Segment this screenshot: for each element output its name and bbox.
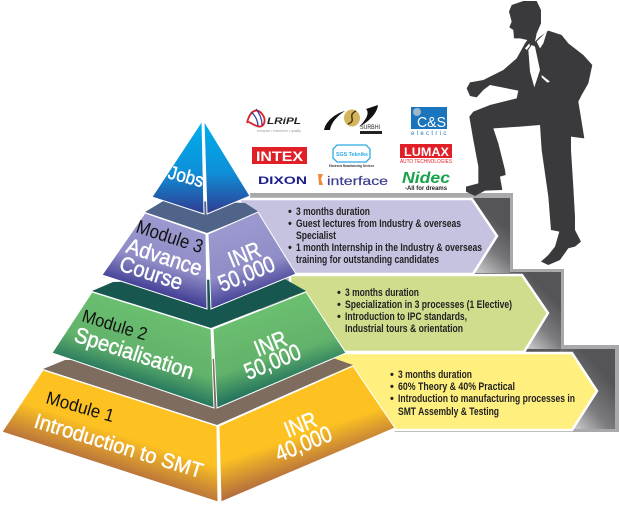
logo: LRIPL: LRiPL xyxy=(267,116,301,127)
logo: SGS Tekniks xyxy=(329,145,374,168)
text: module 2 bullets xyxy=(337,287,512,335)
pyramid tier: module 3 xyxy=(102,200,296,309)
text: module 1 bullets: • xyxy=(390,369,394,381)
arrow: module 1 details xyxy=(330,353,597,430)
logo: INTEX: INTEX xyxy=(256,148,304,164)
label: module 2: Module 2 xyxy=(80,306,150,344)
text: module 2 bullets: Industrial tours & orientation xyxy=(345,323,463,335)
label: specialisation: Specialisation xyxy=(71,322,197,384)
logo: LRIPL: enhance • transform • quality xyxy=(257,129,301,133)
text: module 2 bullets: • xyxy=(337,311,341,323)
logo: interface: interface xyxy=(327,176,388,188)
text: module 3 bullets: • xyxy=(288,242,292,254)
text: module 1 bullets: • xyxy=(390,393,394,405)
text: module 3 bullets: Guest lectures from Industry & overseas xyxy=(296,218,461,230)
text: module 2 bullets: Introduction to IPC standards, xyxy=(345,311,467,323)
logo: SGS Tekniks: Electronic Manufacturing Services xyxy=(329,164,374,168)
label: jobs: Jobs xyxy=(166,163,206,192)
logo: SGS Tekniks: SGS Tekniks xyxy=(336,152,368,158)
arrow: module 2 details xyxy=(290,275,548,352)
logo: LUMAX: LUMAX xyxy=(404,145,449,159)
text: module 1 bullets xyxy=(390,369,575,418)
text: module 2 bullets: Specialization in 3 processes (1 Elective) xyxy=(345,299,512,311)
label: advance: Advance xyxy=(123,233,205,281)
text: module 2 bullets: • xyxy=(337,299,341,311)
logo: Nidec: -All for dreams xyxy=(405,186,448,192)
price: module 2: 50,000 xyxy=(240,338,305,385)
logo: C&S electric xyxy=(411,107,447,137)
pyramid tier: module 1 xyxy=(2,358,395,502)
logo: Nidec: Nidec xyxy=(402,170,450,187)
text: module 1 bullets: 3 months duration xyxy=(398,369,472,381)
arrow: module 3 details xyxy=(240,199,497,274)
label: course: Course xyxy=(116,251,186,295)
logo: Surbhi xyxy=(324,105,382,134)
logo: LRIPL xyxy=(247,109,301,133)
price: module 2: INR xyxy=(250,325,290,362)
price: module 3: INR xyxy=(224,236,264,273)
text: module 2 bullets: 3 months duration xyxy=(345,287,419,299)
text: module 3 bullets: training for outstanding candidates xyxy=(296,254,439,266)
text: module 1 bullets: 60% Theory & 40% Practical xyxy=(398,381,515,393)
logo: LUMAX xyxy=(400,144,453,165)
logo: C&S electric: C&S xyxy=(417,114,446,131)
text: module 1 bullets: SMT Assembly & Testing xyxy=(398,406,499,418)
text: module 3 bullets: 1 month Internship in the Industry & overseas xyxy=(296,242,482,254)
staircase xyxy=(250,193,619,432)
pyramid top: jobs xyxy=(152,121,250,214)
pyramid tier: module 2 xyxy=(52,278,346,408)
price: module 1: INR xyxy=(280,406,320,443)
logo: interface xyxy=(318,174,388,188)
logo: Surbhi: SURBHI xyxy=(360,125,380,131)
label: module 1: Module 1 xyxy=(44,388,117,426)
logo: Dixon: DIXON xyxy=(258,175,307,187)
text: module 3 bullets: 3 months duration xyxy=(296,206,370,218)
text: module 1 bullets: • xyxy=(390,381,394,393)
text: module 3 bullets: Specialist xyxy=(296,230,336,242)
text: module 2 bullets: • xyxy=(337,287,341,299)
label: module 3: Module 3 xyxy=(133,217,206,258)
logo: LUMAX: AUTO TECHNOLOGIES xyxy=(400,159,453,165)
text: module 3 bullets xyxy=(288,206,482,266)
text: module 1 bullets: Introduction to manufacturing processes in xyxy=(398,393,575,405)
label: introduction to SMT: Introduction to SMT xyxy=(32,410,206,483)
price: module 1: 40,000 xyxy=(271,420,336,467)
text: module 3 bullets: • xyxy=(288,206,292,218)
text: module 3 bullets: • xyxy=(288,218,292,230)
logo: C&S electric: electric xyxy=(411,131,447,137)
icon: businessman silhouette climbing steps xyxy=(466,1,592,265)
price: module 3: 50,000 xyxy=(214,250,279,297)
